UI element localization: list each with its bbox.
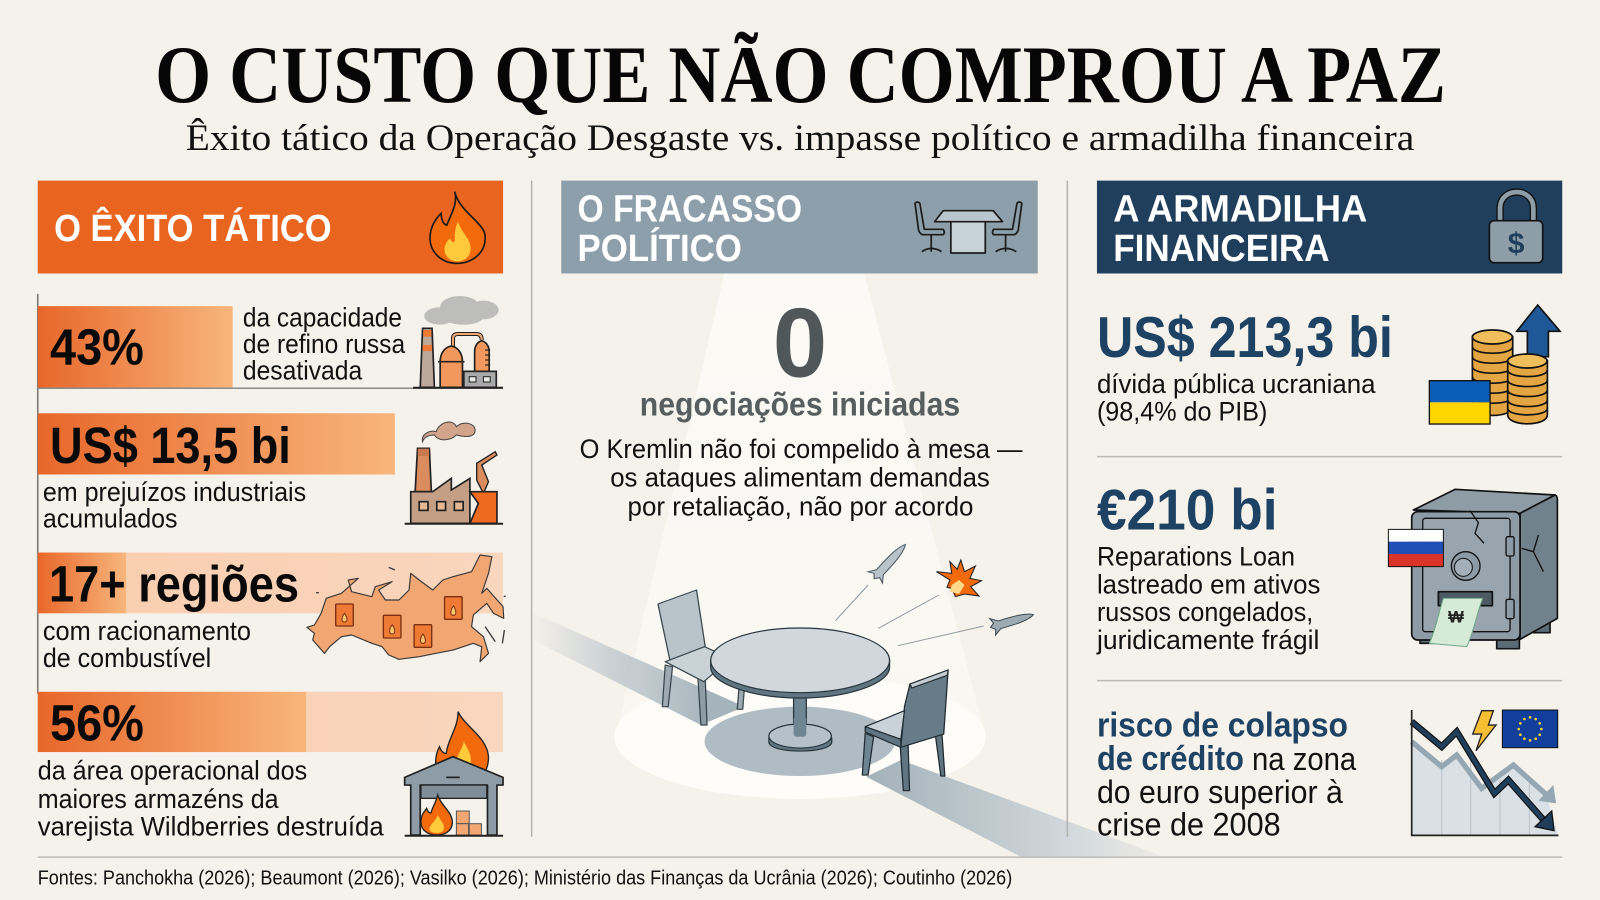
chair right: [862, 670, 948, 791]
stat: 56% warehouse: [38, 692, 503, 841]
stat: 56% warehouse: 56%: [50, 694, 144, 751]
text block: kremlin: por retaliação, não por acordo: [628, 491, 973, 521]
header: o fracasso político: [561, 181, 1038, 273]
stat: risco de colapso: [1097, 707, 1558, 843]
header: a armadilha financeira: [1097, 181, 1562, 273]
stat: US$ 13,5 bi factory: acumulados: [43, 504, 178, 534]
icon: explosion: [936, 560, 982, 597]
text block: kremlin: os ataques alimentam demandas: [610, 463, 990, 493]
divider: [1097, 680, 1562, 682]
illustration: empty table with shadows and missiles: [530, 539, 1159, 857]
stat: 17+ regiões map: [38, 553, 506, 673]
icon: refinery: [413, 296, 503, 388]
stat: €210 bi: Reparations Loan: [1097, 541, 1295, 571]
icon: negotiating table: [915, 202, 1022, 253]
divider: [1097, 456, 1562, 458]
stat: 43% refinery: da capacidade: [243, 303, 402, 333]
text block: kremlin: [580, 434, 1023, 521]
panel: o êxito tático: [38, 181, 506, 841]
icon: map of russia with fuel cans: [307, 555, 506, 662]
stat: €210 bi: [1096, 479, 1557, 655]
trajectory lines: [835, 585, 984, 646]
stat: €210 bi: lastreado em ativos: [1097, 569, 1320, 599]
header: a armadilha financeira: A ARMADILHA: [1113, 187, 1367, 229]
label: negociações iniciadas: negociações iniciadas: [640, 386, 960, 423]
stat: risco de colapso: de crédito: [1097, 740, 1244, 778]
header: a armadilha financeira: FINANCEIRA: [1113, 227, 1330, 269]
stat: €210 bi: russos congelados,: [1097, 597, 1313, 627]
stat: 43% refinery: de refino russa: [243, 329, 405, 359]
vertical rule: [37, 294, 39, 694]
stat: risco de colapso: crise de 2008: [1097, 806, 1281, 843]
icon: damaged factory: [405, 422, 503, 524]
title: O CUSTO QUE NÃO COMPROU A PAZ: [155, 29, 1446, 120]
stat: 43% refinery: desativada: [243, 356, 362, 386]
icon: missile right: [988, 606, 1036, 636]
table: [711, 628, 890, 751]
chart icon: falling credit lines with EU flag: [1412, 710, 1558, 835]
spotlight: [614, 273, 986, 799]
header: o êxito tático: O ÊXITO TÁTICO: [54, 207, 332, 249]
panel: a armadilha financeira: [1096, 181, 1562, 843]
stat: 17+ regiões map: 17+ regiões: [49, 556, 299, 613]
stat: 56% warehouse: maiores armazéns da: [38, 784, 279, 814]
stat: US$ 213,3 bi: dívida pública ucraniana: [1097, 369, 1376, 399]
icon: flame: [430, 192, 485, 263]
stat: 56% warehouse: varejista Wildberries destruída: [38, 811, 384, 841]
stat: risco de colapso: na zona: [1252, 740, 1357, 777]
stat: risco de colapso: risco de colapso: [1097, 707, 1348, 745]
stat: 56% warehouse: da área operacional dos: [38, 756, 307, 786]
footer: sources: Fontes: Panchokha (2026); Beaumont (2026); Vasilko (2026); Ministério das Finanças da Ucrânia (2026); Coutinho (2026): [38, 868, 1012, 890]
stat: 43% refinery: 43%: [50, 318, 144, 375]
stat: 43% refinery: [38, 296, 503, 388]
header: o fracasso político: POLÍTICO: [578, 227, 742, 269]
stat: US$ 213,3 bi: [1097, 305, 1560, 426]
stat: €210 bi: €210 bi: [1097, 479, 1278, 543]
icon: cracked safe with flag and banknote: [1388, 489, 1557, 649]
subtitle: Êxito tático da Operação Desgaste vs. impasse político e armadilha financeira: [186, 117, 1414, 158]
stat: 17+ regiões map: com racionamento: [43, 616, 251, 646]
column dividers: [532, 181, 1067, 837]
header: o fracasso político: O FRACASSO: [578, 187, 802, 229]
stat: US$ 213,3 bi: US$ 213,3 bi: [1097, 306, 1393, 370]
stat: US$ 13,5 bi factory: US$ 13,5 bi: [50, 417, 291, 474]
stat: US$ 13,5 bi factory: em prejuízos industriais: [43, 477, 306, 507]
icon: padlock: [1489, 192, 1543, 263]
icon: burning warehouse: [405, 712, 503, 836]
header: o êxito tático: [38, 181, 503, 273]
icon: padlock: $: [1508, 227, 1525, 260]
stat: US$ 13,5 bi factory: [38, 413, 503, 534]
icon: cracked safe with flag and banknote: ₩: [1448, 608, 1464, 627]
stat: €210 bi: juridicamente frágil: [1096, 625, 1319, 655]
big zero: 0: [773, 288, 827, 398]
stat: US$ 213,3 bi: (98,4% do PIB): [1097, 396, 1267, 426]
chair left: [658, 590, 745, 725]
text block: kremlin: O Kremlin não foi compelido à mesa —: [580, 434, 1023, 464]
icon: missile upper: [867, 539, 913, 584]
panel: o fracasso político: [530, 181, 1159, 857]
stat: risco de colapso: do euro superior à: [1097, 773, 1344, 810]
stat: 17+ regiões map: de combustível: [43, 643, 211, 673]
icon: coins, arrow and ukrainian flag: [1429, 305, 1560, 424]
